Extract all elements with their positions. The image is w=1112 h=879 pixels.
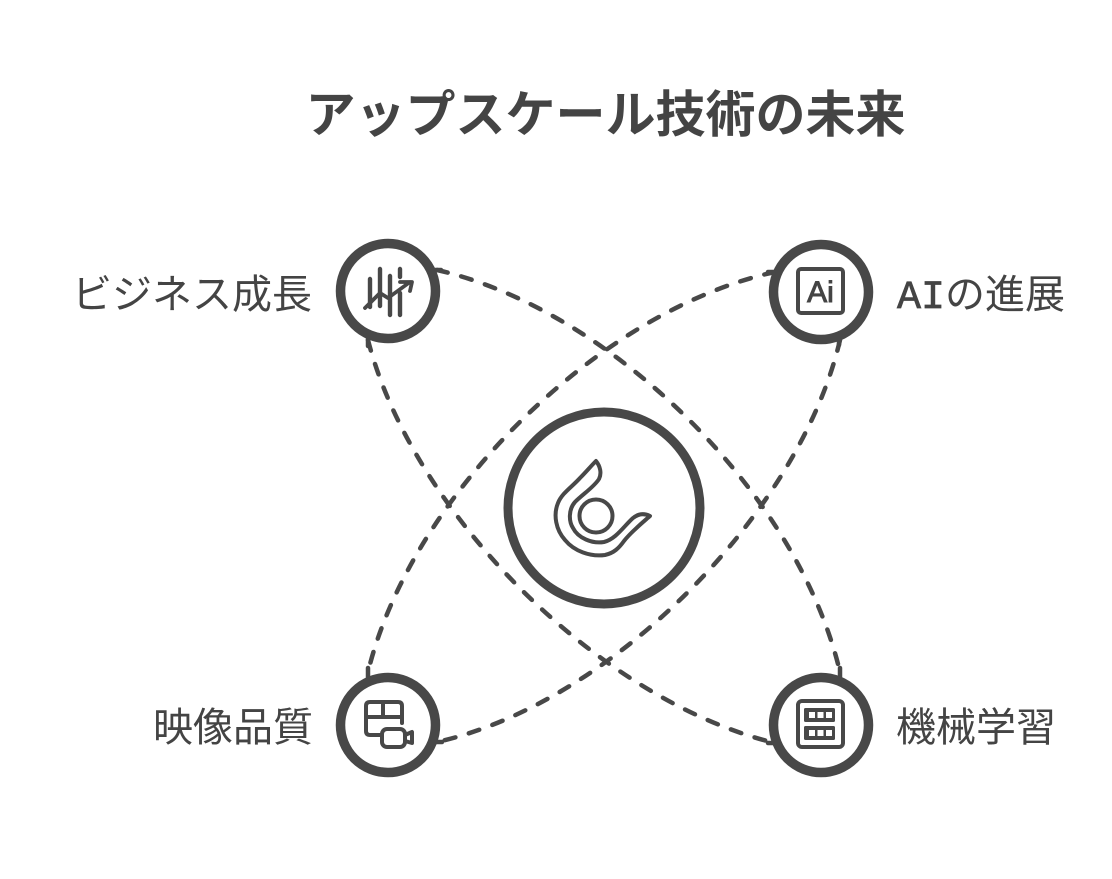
node: AI progress [768, 244, 1065, 345]
icon: grid and camera [366, 702, 412, 747]
connector stubs: AI progress [768, 272, 839, 345]
icon: rising chart [365, 269, 412, 315]
node: video quality [153, 668, 442, 772]
connector stubs: machine learning [768, 668, 840, 743]
circle: machine learning [774, 678, 868, 772]
connector stubs: business growth [368, 270, 441, 346]
dashed connectors [368, 270, 840, 743]
label: video quality: 映像品質 [153, 706, 313, 750]
label: business growth: ビジネス成長 [72, 273, 312, 317]
circle: video quality [340, 678, 436, 772]
node: machine learning [768, 668, 1056, 772]
label: machine learning: 機械学習 [896, 706, 1056, 750]
icon: upscale logo [556, 461, 650, 555]
title: アップスケール技術の未来 [306, 87, 906, 143]
connector stubs: video quality [368, 668, 442, 742]
circle: AI progress [774, 244, 868, 340]
central circle with upscale logo [508, 412, 700, 604]
circle: business growth [340, 244, 436, 338]
icon: memory panel [798, 701, 843, 747]
icon: AI box [798, 269, 843, 313]
icon: AI box: Ai [807, 276, 834, 309]
label: AI progress: AIの進展 [897, 273, 1065, 321]
node: business growth [72, 244, 441, 346]
